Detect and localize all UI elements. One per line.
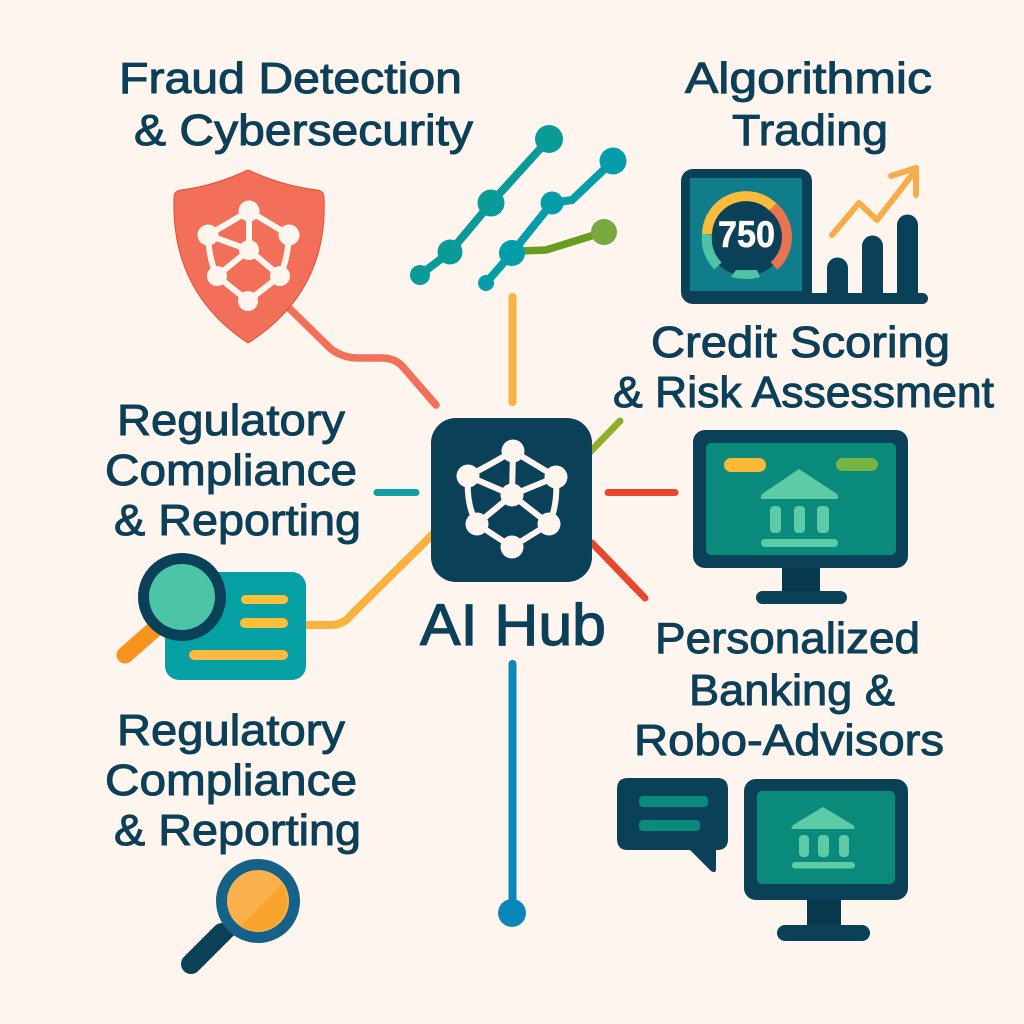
gauge: 750 [718,214,775,255]
icon: bank monitor [693,430,908,604]
document card [165,572,306,680]
hub label: AI Hub [420,593,606,658]
icon: compliance document with magnifier [125,553,306,680]
heading: Algorithmic Trading: Trading [732,106,888,155]
heading: Personalized Banking & Robo-Advisors: Personalized [655,614,920,663]
connector: yellow vertical line [508,297,516,402]
connector: blue line with end node [498,664,526,927]
heading: Regulatory Compliance & Reporting (repeat) [105,706,361,855]
connector: red line to shield [290,309,436,405]
heading: Regulatory Compliance & Reporting (repeat): & Reporting [114,806,361,855]
connector: green diagonal line [590,421,620,452]
tablet screen [690,178,802,291]
heading: Algorithmic Trading: Algorithmic [685,54,932,103]
magnifier lens [138,553,226,641]
growth arrow [832,168,916,235]
heading: Regulatory Compliance & Reporting: Compliance [105,446,357,495]
heading: Regulatory Compliance & Reporting: & Reporting [114,496,361,545]
chain: left teal [410,125,563,285]
icon: credit score gauge and growth chart [681,168,928,304]
bank glyph [792,807,855,868]
bank glyph [761,469,838,547]
bars [827,214,918,296]
tablet frame [681,169,812,304]
heading: Credit Scoring & Risk Assessment: Credit Scoring [651,318,950,367]
chain: right blue-teal [478,148,626,291]
heading: Fraud Detection & Cybersecurity [119,54,473,155]
heading: Personalized Banking & Robo-Advisors [634,614,944,765]
base line [690,293,928,304]
icon: magnifying glass [191,859,300,964]
heading: Regulatory Compliance & Reporting [105,396,361,545]
heading: Personalized Banking & Robo-Advisors: Banking & [689,666,895,715]
heading: Fraud Detection & Cybersecurity: & Cybersecurity [134,106,473,155]
heading: Personalized Banking & Robo-Advisors: Robo-Advisors [634,716,944,765]
icon: robo-advisor bank monitor [744,779,908,941]
heading: Regulatory Compliance & Reporting: Regulatory [117,396,345,445]
heading: Fraud Detection & Cybersecurity: Fraud Detection [119,54,462,103]
chain: green branch [520,219,617,251]
connector: yellow line to document [304,533,434,625]
icon: shield with network [174,170,324,343]
gauge [707,196,787,279]
heading: Credit Scoring & Risk Assessment: & Risk Assessment [613,368,994,417]
connector: red diagonal line [592,543,645,598]
icon: chat bubble [617,778,728,872]
heading: Regulatory Compliance & Reporting (repeat): Compliance [105,756,357,805]
hub icon [431,418,592,582]
connector: teal line to compliance [377,489,416,496]
connector: red horizontal line [608,489,675,496]
icon: teal network chains [410,125,626,291]
magnifier handle [125,620,165,655]
heading: Algorithmic Trading [685,54,932,155]
heading: Regulatory Compliance & Reporting (repeat): Regulatory [117,706,345,755]
heading: Credit Scoring & Risk Assessment [613,318,994,417]
